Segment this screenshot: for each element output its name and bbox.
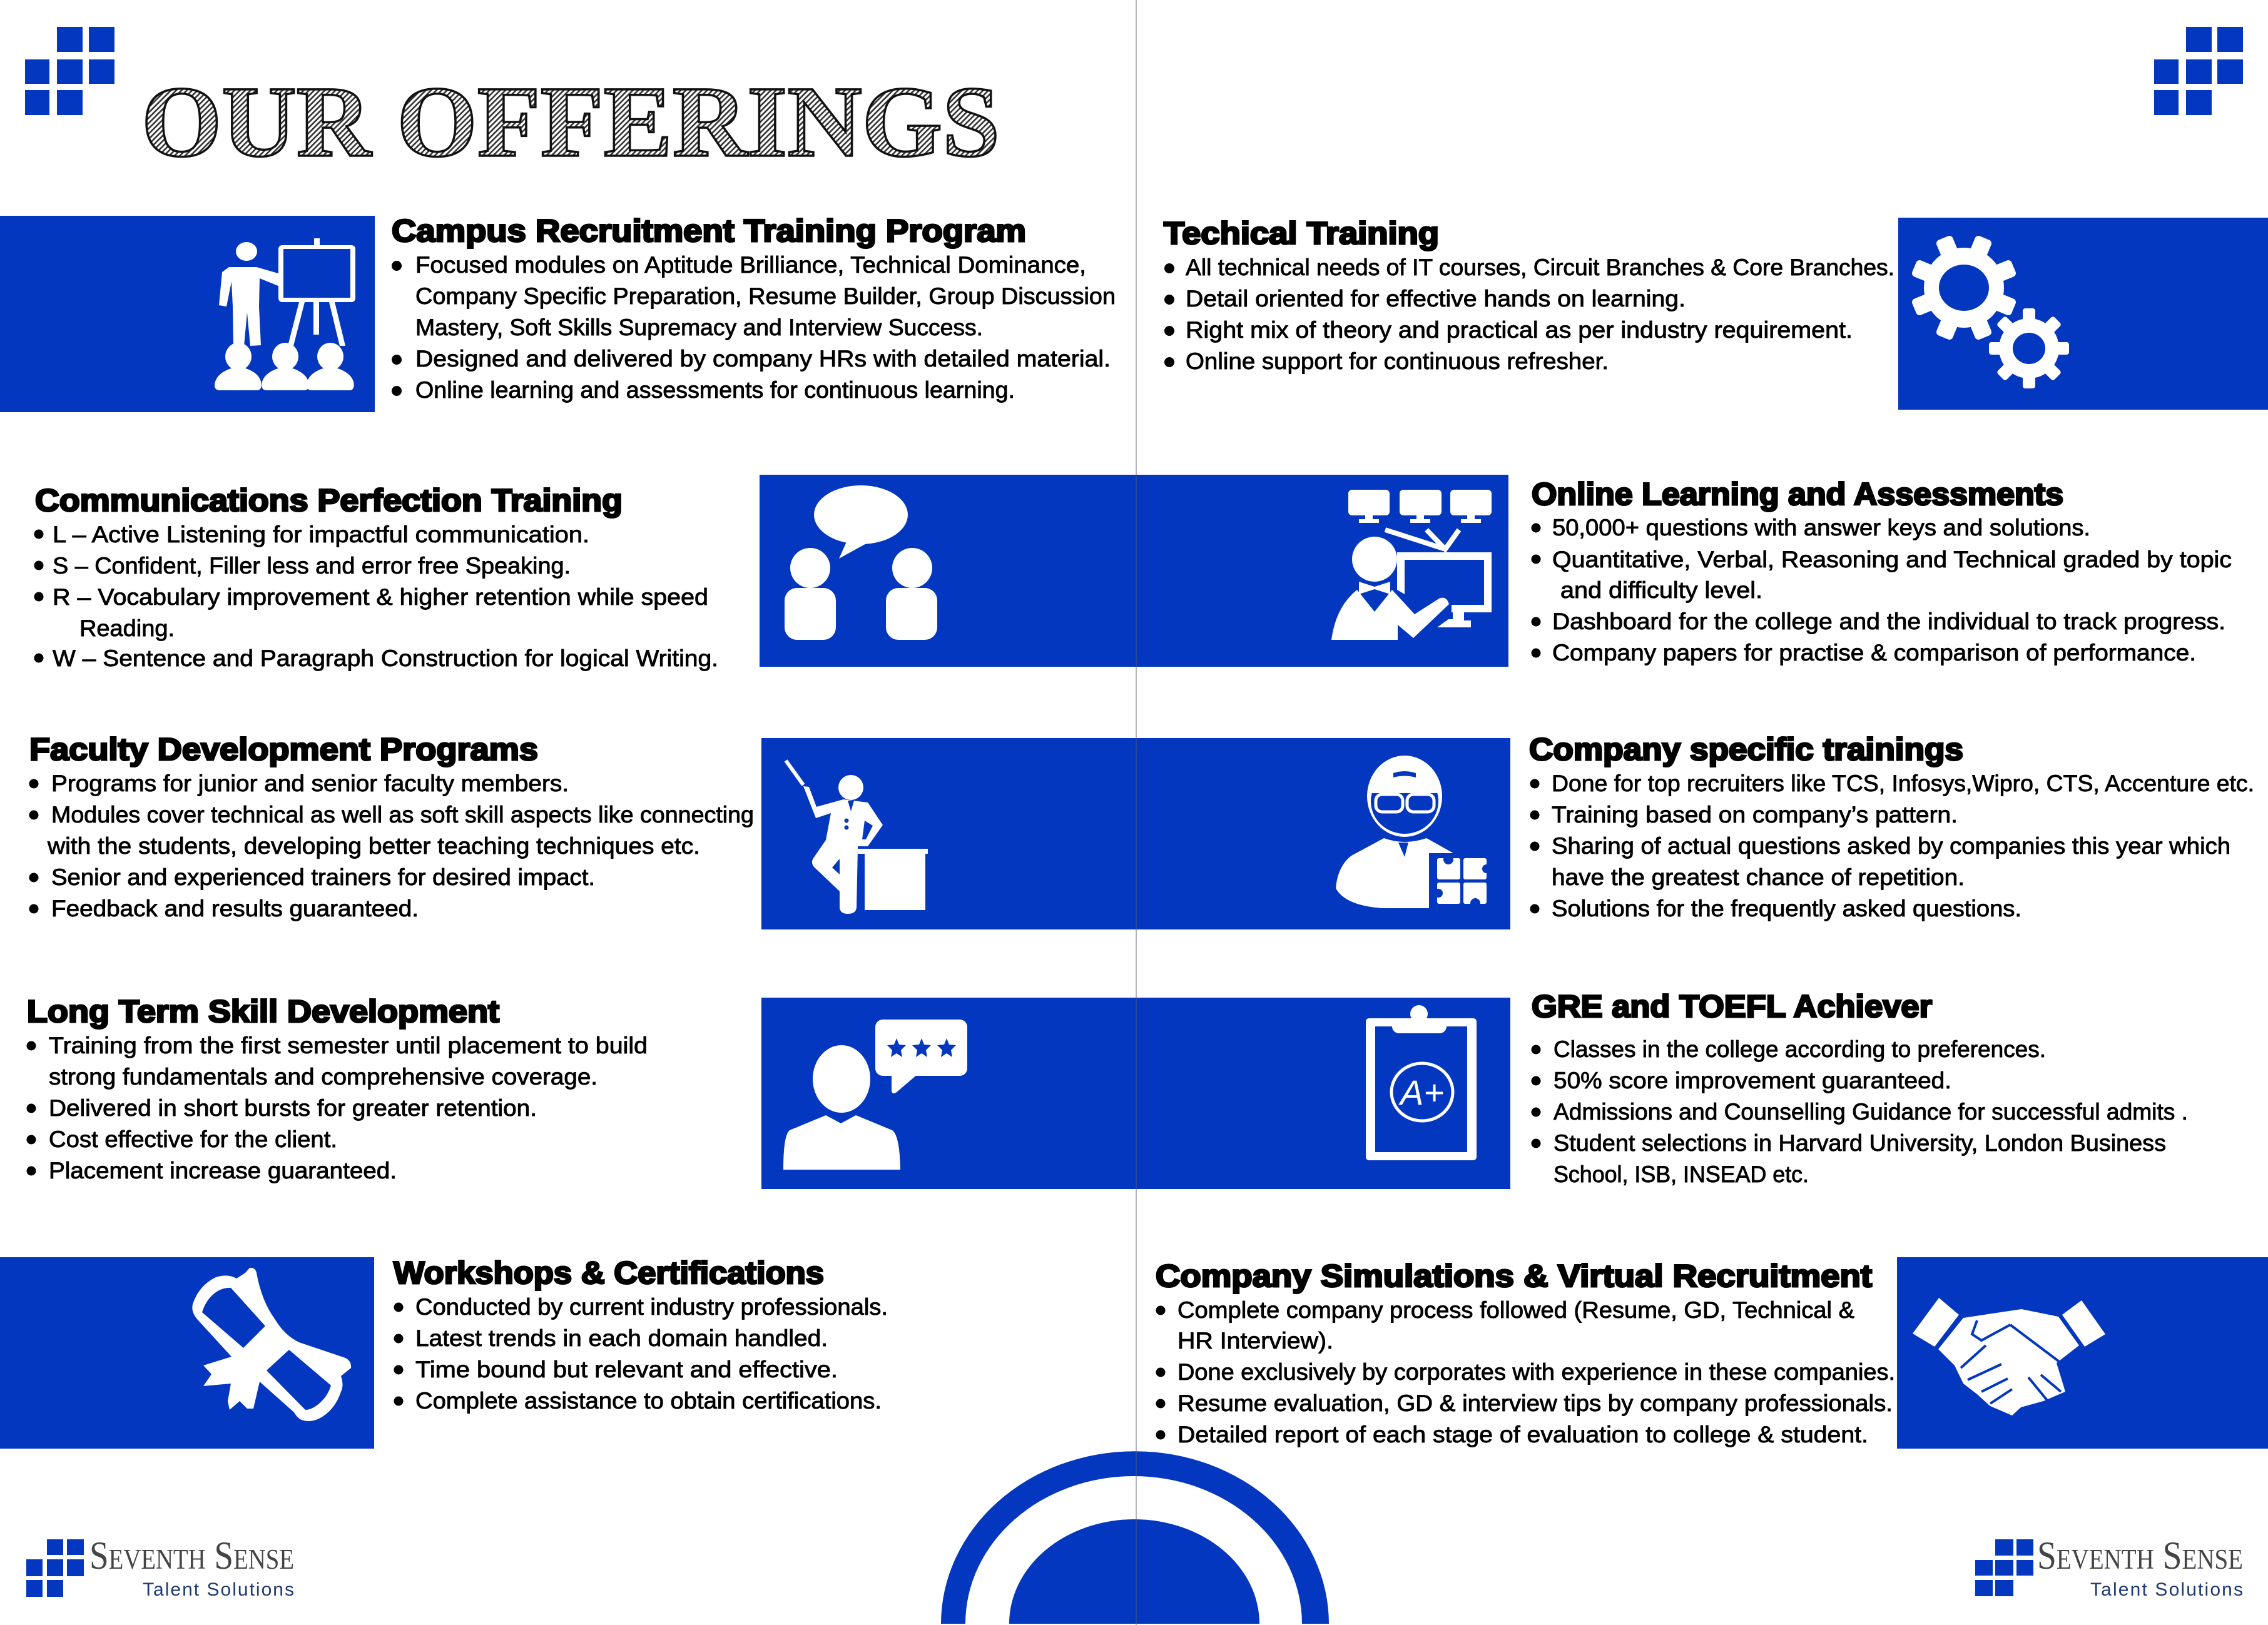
bullet list: with the students, developing better teaching techniques etc. xyxy=(47,833,700,859)
bullet list: S – Confident, Filler less and error free Speaking. xyxy=(53,553,571,579)
bullet list: Company papers for practise & comparison of performance. xyxy=(1552,640,2196,666)
bullet list: Training based on company’s pattern. xyxy=(1552,802,1958,828)
bullet list: W – Sentence and Paragraph Construction for logical Writing. xyxy=(53,645,718,671)
text block: company simulations and virtual recruitment xyxy=(1156,1258,1895,1447)
logo: Seventh Sense right footer xyxy=(1975,1533,2243,1600)
icon: clipboard with A+ grade: A+ xyxy=(1398,1073,1444,1112)
text block: communications perfection training xyxy=(34,483,718,671)
heading: Workshops & Certifications xyxy=(394,1255,824,1290)
icon: person with star rating speech bubble xyxy=(783,1020,967,1170)
panel: technical training blue box xyxy=(1898,218,2268,410)
bullet list: Placement increase guaranteed. xyxy=(49,1158,397,1183)
bullet list: 50% score improvement guaranteed. xyxy=(1554,1068,1951,1093)
logo: Seventh Sense left footer xyxy=(26,1533,294,1600)
heading: Online Learning and Assessments xyxy=(1532,477,2063,512)
panel: campus recruitment blue box xyxy=(0,216,375,412)
bullet list: Reading. xyxy=(79,615,175,641)
bullet list: Classes in the college according to preferences. xyxy=(1554,1036,2046,1062)
bullet list: All technical needs of IT courses, Circuit Branches & Core Branches. xyxy=(1186,255,1894,280)
bullet list: School, ISB, INSEAD etc. xyxy=(1554,1162,1809,1187)
text block: GRE and TOEFL achiever xyxy=(1532,989,2188,1187)
icon: top-left logo squares xyxy=(25,27,114,115)
logo wordmark: Seventh Sense xyxy=(89,1533,294,1577)
heading: Long Term Skill Development xyxy=(27,994,499,1029)
heading: GRE and TOEFL Achiever xyxy=(1532,989,1932,1024)
logo tagline: Talent Solutions xyxy=(2090,1579,2243,1600)
bullet list: Quantitative, Verbal, Reasoning and Technical graded by topic xyxy=(1552,547,2232,572)
bullet list: L – Active Listening for impactful communication. xyxy=(53,522,589,547)
bullet list: Resume evaluation, GD & interview tips by company professionals. xyxy=(1177,1390,1893,1416)
bullet list: Done exclusively by corporates with experience in these companies. xyxy=(1177,1359,1895,1385)
bullet list: Conducted by current industry professionals. xyxy=(415,1294,888,1320)
bullet list: Mastery, Soft Skills Supremacy and Interview Success. xyxy=(415,315,983,340)
icon: clipboard with A+ grade xyxy=(1366,1005,1477,1160)
text block: long term skill development xyxy=(26,994,648,1183)
bullet list: Company Specific Preparation, Resume Builder, Group Discussion xyxy=(415,283,1116,309)
bullet list: Senior and experienced trainers for desired impact. xyxy=(51,864,595,890)
bullet list: Right mix of theory and practical as per industry requirement. xyxy=(1186,317,1853,343)
bullet list: and difficulty level. xyxy=(1560,577,1762,603)
bullet list: Focused modules on Aptitude Brilliance, Technical Dominance, xyxy=(415,252,1086,278)
bullet list: Feedback and results guaranteed. xyxy=(51,896,419,921)
bullet list: Solutions for the frequently asked questions. xyxy=(1552,896,2021,921)
logo wordmark: Seventh Sense xyxy=(2037,1533,2243,1577)
bullet list: Detailed report of each stage of evaluation to college & student. xyxy=(1177,1422,1868,1447)
icon: rolled diploma with ribbon xyxy=(192,1268,351,1421)
bullet list: HR Interview). xyxy=(1177,1328,1333,1354)
icon: teacher with pointer and desk xyxy=(786,761,928,914)
bullet list: strong fundamentals and comprehensive coverage. xyxy=(49,1064,598,1090)
panel: faculty and company trainings blue band xyxy=(761,738,1510,929)
bullet list: Training from the first semester until placement to build xyxy=(49,1033,648,1058)
icon: logo squares xyxy=(26,1539,84,1597)
bullet list: Complete assistance to obtain certifications. xyxy=(415,1388,882,1414)
heading: Company specific trainings xyxy=(1529,732,1963,767)
panel: company simulations blue box xyxy=(1897,1257,2268,1449)
icon: online tutor with monitors xyxy=(1331,490,1492,640)
icon: top-right logo squares xyxy=(2154,27,2243,115)
bullet list: Latest trends in each domain handled. xyxy=(415,1325,828,1351)
bullet list xyxy=(1532,1036,2188,1187)
bullet list xyxy=(1530,771,2254,921)
bullet list: Complete company process followed (Resume, GD, Technical & xyxy=(1177,1297,1854,1323)
heading: Faculty Development Programs xyxy=(29,732,538,767)
arch: concentric half circles at bottom centre xyxy=(941,1451,1329,1624)
heading: Campus Recruitment Training Program xyxy=(392,213,1026,248)
bullet list: R – Vocabulary improvement & higher retention while speed xyxy=(53,584,708,610)
bullet list: 50,000+ questions with answer keys and solutions. xyxy=(1552,515,2090,540)
bullet list: Student selections in Harvard University, London Business xyxy=(1554,1130,2166,1156)
panel: skill development and GRE blue band xyxy=(761,998,1510,1189)
icon: presenter with easel and audience xyxy=(215,238,355,390)
panel: workshops blue box xyxy=(0,1257,374,1449)
bullet list xyxy=(29,771,754,921)
bullet list: Dashboard for the college and the individual to track progress. xyxy=(1552,609,2225,634)
bullet list xyxy=(1532,515,2232,666)
bullet list: Designed and delivered by company HRs with detailed material. xyxy=(415,346,1111,372)
bullet list: Detail oriented for effective hands on learning. xyxy=(1186,286,1686,311)
bullet list xyxy=(1156,1297,1895,1447)
bullet list xyxy=(394,1294,888,1414)
text block: faculty development programs xyxy=(29,732,754,921)
bullet list: Time bound but relevant and effective. xyxy=(415,1357,838,1382)
heading: Techical Training xyxy=(1164,216,1439,251)
bullet list: Modules cover technical as well as soft skill aspects like connecting xyxy=(51,802,754,828)
title: OUR OFFERINGS xyxy=(141,66,1000,178)
text block: workshops and certifications xyxy=(394,1255,888,1414)
bullet list: have the greatest chance of repetition. xyxy=(1552,864,1965,890)
text block: campus recruitment training program xyxy=(392,213,1116,403)
heading: Company Simulations & Virtual Recruitment xyxy=(1156,1258,1872,1293)
icon: two people talking xyxy=(785,485,937,640)
icon: handshake xyxy=(1913,1298,2105,1415)
heading: Communications Perfection Training xyxy=(35,483,623,518)
icon: gears xyxy=(1911,235,2069,388)
text block: technical training xyxy=(1164,216,1894,374)
bullet list: Sharing of actual questions asked by companies this year which xyxy=(1552,833,2230,859)
icon: engineer with glasses and puzzle xyxy=(1336,756,1491,909)
bullet list xyxy=(1164,255,1894,374)
bullet list xyxy=(26,1033,648,1183)
bullet list: Cost effective for the client. xyxy=(49,1126,337,1152)
panel: communications and online learning blue band xyxy=(760,475,1508,667)
bullet list: Online support for continuous refresher. xyxy=(1186,348,1609,374)
logo tagline: Talent Solutions xyxy=(143,1579,294,1600)
text block: online learning and assessments xyxy=(1532,477,2232,666)
icon: logo squares xyxy=(1975,1539,2033,1596)
text block: company specific trainings xyxy=(1529,732,2254,921)
bullet list: Programs for junior and senior faculty members. xyxy=(51,771,569,796)
bullet list xyxy=(392,252,1116,403)
bullet list: Delivered in short bursts for greater retention. xyxy=(49,1095,537,1121)
bullet list: Admissions and Counselling Guidance for successful admits . xyxy=(1554,1099,2188,1125)
bullet list: Done for top recruiters like TCS, Infosys,Wipro, CTS, Accenture etc. xyxy=(1552,771,2254,796)
bullet list: Online learning and assessments for continuous learning. xyxy=(415,377,1015,403)
bullet list xyxy=(34,522,718,671)
